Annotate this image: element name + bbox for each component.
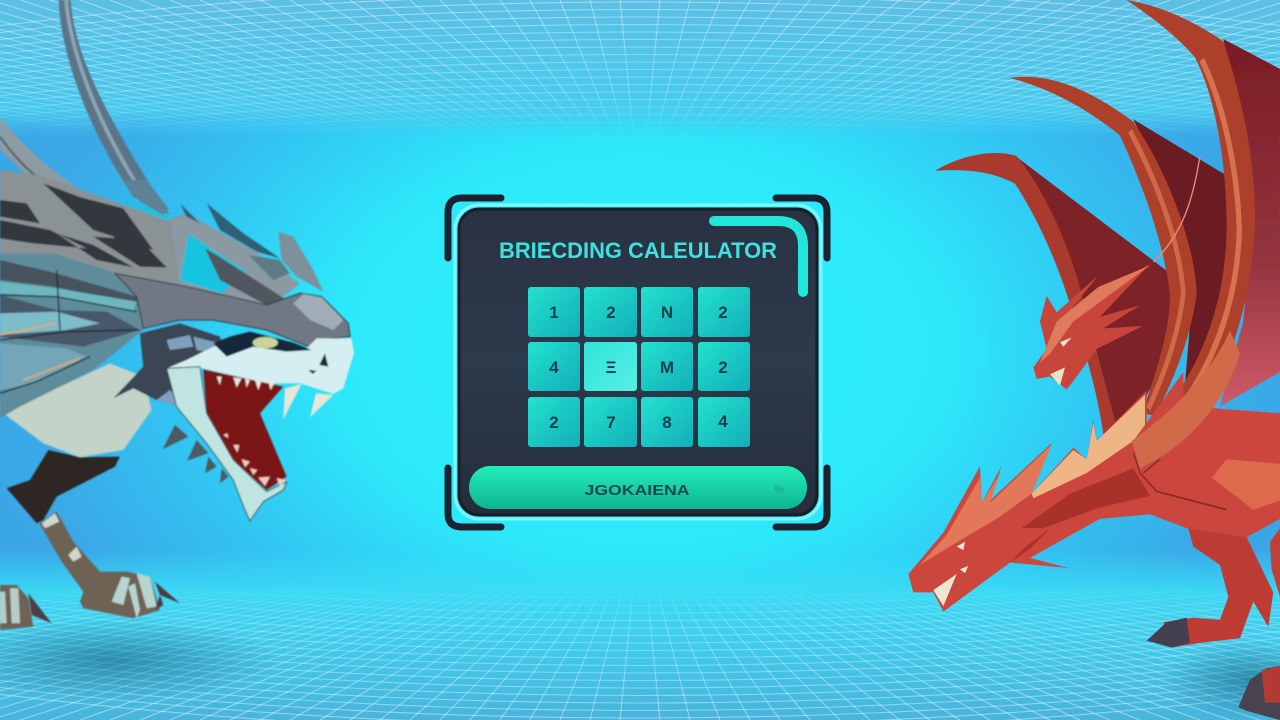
keypad labels: 8 xyxy=(662,413,672,432)
keypad labels: 4 xyxy=(718,412,728,431)
keypad labels: Ξ xyxy=(606,358,617,377)
head crest highlight xyxy=(920,445,1052,565)
keypad labels: 2 xyxy=(549,413,559,432)
top grid band xyxy=(0,0,1280,200)
feathered wing xyxy=(0,253,143,418)
red two-headed dragon xyxy=(908,0,1280,720)
wing shoulder xyxy=(1132,331,1240,468)
keypad labels: 2 xyxy=(718,358,728,377)
back mane xyxy=(0,170,187,300)
keypad labels: 2 xyxy=(606,303,616,322)
top wing arm xyxy=(1127,0,1255,471)
neck spines xyxy=(1032,395,1145,498)
keypad labels: 1 xyxy=(549,303,559,322)
keypad labels: M xyxy=(660,358,674,377)
bottom grid floor xyxy=(0,520,1280,720)
calculator panel xyxy=(448,198,827,527)
action button: JGOKAIENA xyxy=(584,482,690,499)
near claw xyxy=(1147,618,1190,647)
body shadow lines xyxy=(1010,468,1150,563)
cheek plate xyxy=(113,323,227,408)
keypad xyxy=(528,287,750,447)
nostril xyxy=(308,353,328,374)
fangs xyxy=(217,377,333,419)
main head eyes and teeth xyxy=(933,542,968,606)
whisker string xyxy=(1153,156,1200,262)
action button xyxy=(469,466,807,509)
rear foot xyxy=(1238,666,1280,720)
panel title: BRIECDING CALEULATOR xyxy=(499,238,777,263)
panel body xyxy=(459,209,817,515)
blue mechanical dragon xyxy=(0,0,354,630)
lower leg and front foot xyxy=(39,512,180,618)
rear leg xyxy=(1270,528,1280,597)
head armour xyxy=(115,273,350,348)
third wing arm xyxy=(935,153,1117,434)
small head xyxy=(1033,264,1150,389)
mouth interior xyxy=(203,369,287,490)
cyan accent xyxy=(714,221,803,292)
keypad labels: 2 xyxy=(718,303,728,322)
small head eye and teeth xyxy=(1050,338,1072,386)
cyan head plate xyxy=(170,203,323,311)
small head crest highlight xyxy=(1040,265,1150,363)
keypad labels: 7 xyxy=(606,413,616,432)
dragon horns xyxy=(0,0,170,215)
top wing membrane xyxy=(1220,39,1280,406)
lower jaw xyxy=(167,367,287,521)
jaw spikes xyxy=(163,425,228,483)
panel glow outline xyxy=(455,205,821,519)
second wing arm xyxy=(1010,77,1197,416)
body highlight xyxy=(1212,459,1280,510)
second wing membrane xyxy=(1133,119,1233,404)
eye xyxy=(253,337,278,348)
lower teeth xyxy=(223,433,287,486)
corner brackets xyxy=(448,198,827,527)
belly xyxy=(3,363,152,457)
brow dome highlight xyxy=(293,294,343,330)
eye socket xyxy=(213,332,312,357)
main neck and body xyxy=(908,372,1280,612)
dragon body and head xyxy=(0,170,354,630)
near leg xyxy=(1163,528,1273,647)
thigh xyxy=(7,450,120,523)
keypad labels: 4 xyxy=(549,358,559,377)
keypad labels xyxy=(549,303,728,432)
third wing membrane xyxy=(1017,157,1175,429)
keypad labels: N xyxy=(661,303,673,322)
rear foot xyxy=(0,585,52,630)
action button: % xyxy=(774,484,784,496)
upper jaw xyxy=(167,337,354,394)
